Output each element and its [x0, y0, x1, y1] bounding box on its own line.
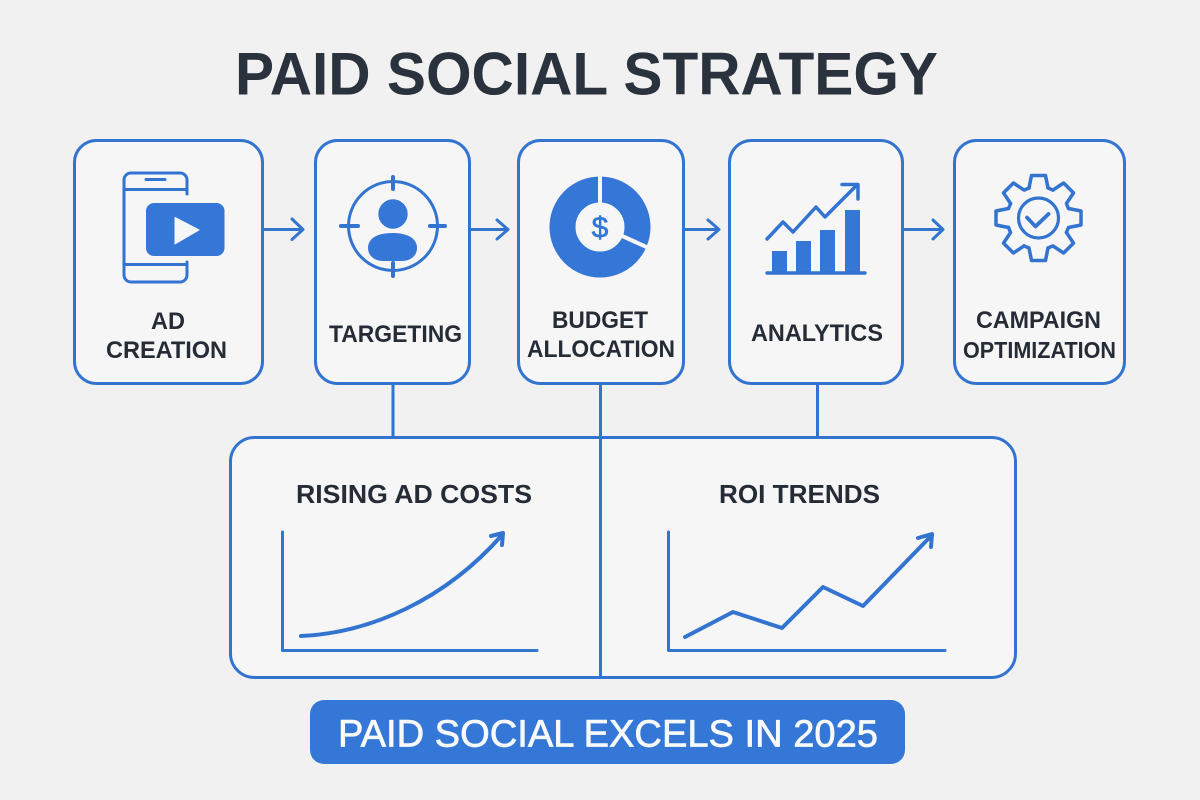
- icon: target with person: [341, 177, 445, 276]
- chart: roi trends: [668, 479, 945, 650]
- connector: budget allocation to bottom panel: [599, 383, 602, 437]
- arrow: targeting to budget allocation: [471, 220, 508, 239]
- panel: ad creation: [74, 140, 262, 384]
- arrow: analytics to campaign optimization: [904, 220, 943, 239]
- panel: budget allocation: [518, 140, 684, 384]
- icon: gear with check mark: [996, 176, 1081, 260]
- label: targeting: TARGETING: [329, 321, 462, 348]
- icon: budget donut with dollar sign: $: [592, 212, 609, 244]
- panel: analytics: [730, 140, 902, 384]
- icon: bar chart with rising arrow: [767, 184, 865, 273]
- label: campaign optimization: OPTIMIZATION: [963, 337, 1116, 363]
- panel: targeting: [316, 140, 470, 384]
- label: campaign optimization: CAMPAIGN: [976, 307, 1101, 334]
- label: analytics: ANALYTICS: [751, 320, 883, 347]
- banner: key takeaway: PAID SOCIAL EXCELS IN 2025: [338, 714, 878, 756]
- label: ad creation: CREATION: [106, 337, 227, 364]
- arrow: budget allocation to analytics: [684, 220, 719, 239]
- panel: campaign optimization: [954, 140, 1124, 384]
- panel: bottom charts: [230, 437, 1016, 678]
- label: ad creation: AD: [151, 308, 185, 335]
- icon: phone with video: [124, 173, 224, 282]
- chart: rising ad costs: [282, 479, 537, 650]
- label: budget allocation: [527, 307, 675, 363]
- icon: budget donut with dollar sign: [562, 174, 652, 264]
- title: PAID SOCIAL STRATEGY: [235, 40, 938, 108]
- label: budget allocation: BUDGET: [552, 307, 648, 334]
- label: budget allocation: ALLOCATION: [527, 336, 675, 363]
- connector: targeting to bottom panel: [392, 383, 394, 437]
- arrow: ad creation to targeting: [263, 219, 303, 240]
- heading: roi trends: ROI TRENDS: [719, 479, 880, 509]
- banner: key takeaway: [310, 700, 905, 764]
- connector: analytics to bottom panel: [816, 383, 819, 437]
- label: campaign optimization: [963, 307, 1116, 363]
- label: ad creation: [106, 308, 227, 364]
- heading: rising ad costs: RISING AD COSTS: [296, 479, 532, 509]
